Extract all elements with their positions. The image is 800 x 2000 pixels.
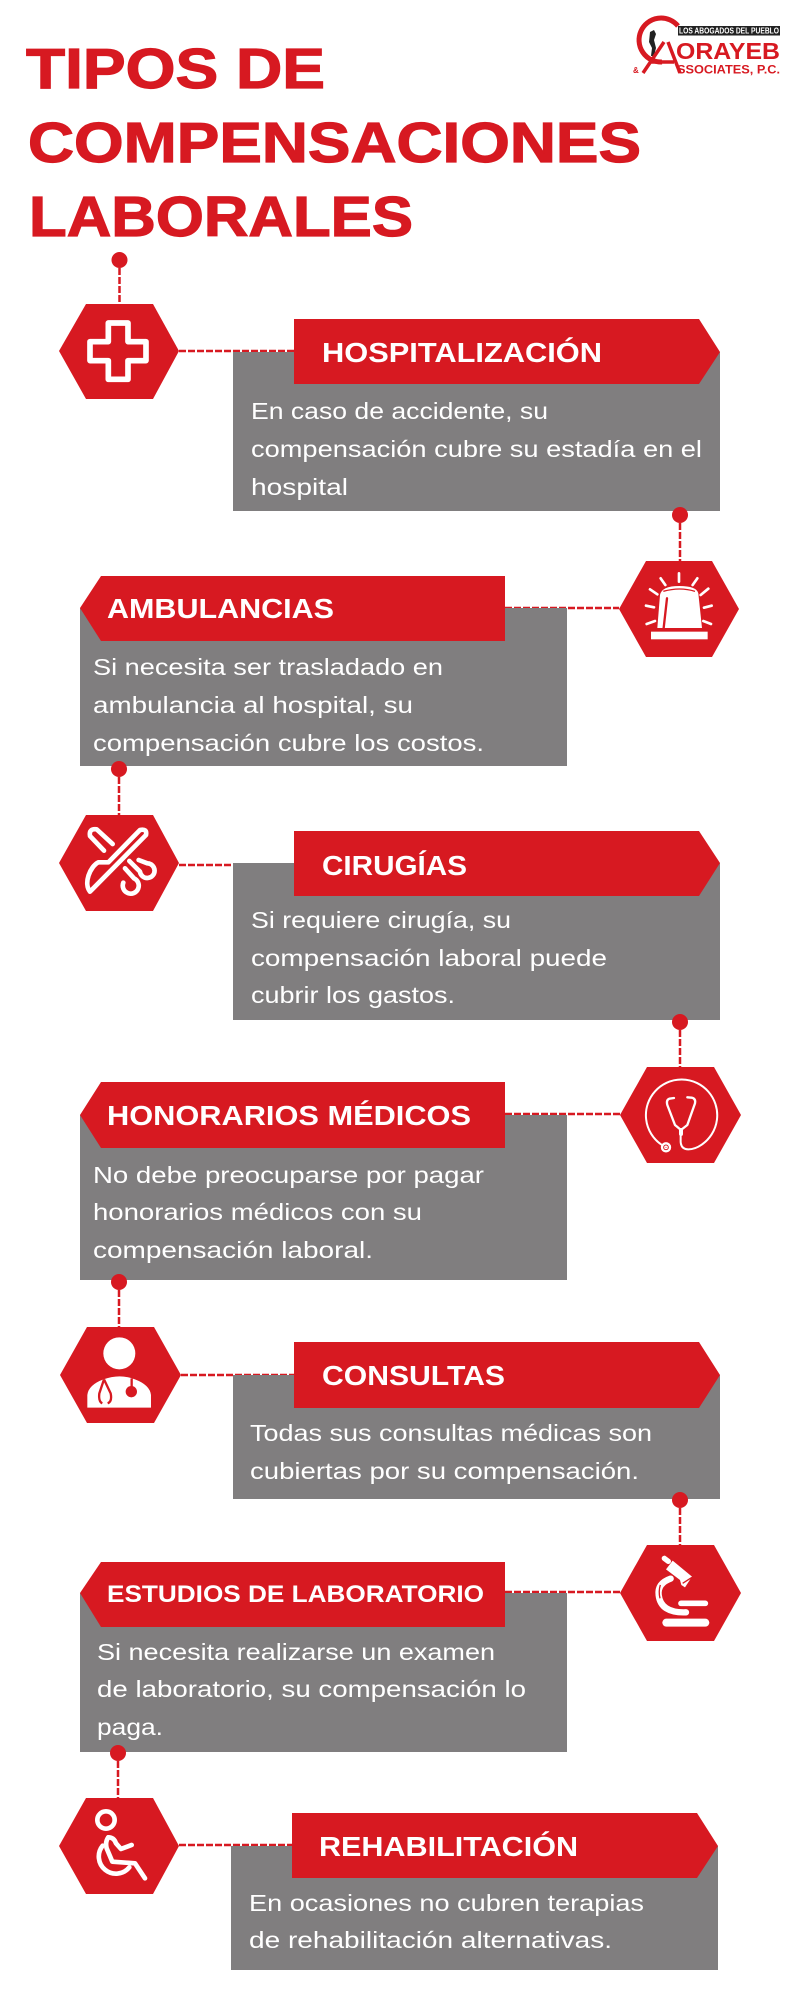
- text block: rehabilitación: [249, 1890, 644, 1953]
- panel: consultas body: [233, 1375, 720, 1499]
- logo: Gorayeb & Associates: &: [633, 66, 639, 75]
- connector: [179, 864, 294, 866]
- heading ribbon: honorarios médicos: HONORARIOS MÉDICOS: [107, 1100, 471, 1131]
- text block: cirugías: cubrir los gastos.: [251, 982, 455, 1008]
- heading ribbon: hospitalización: HOSPITALIZACIÓN: [322, 337, 602, 368]
- connector: [505, 1113, 620, 1115]
- heading ribbon: consultas: CONSULTAS: [322, 1360, 505, 1391]
- heading ribbon: cirugías: [294, 831, 720, 896]
- text block: rehabilitación: de rehabilitación alternativas.: [249, 1927, 612, 1953]
- connector: [505, 1591, 620, 1593]
- text block: ambulancias: [93, 654, 484, 756]
- step 6: estudios de laboratorio: [80, 1545, 741, 1752]
- text block: cirugías: [251, 907, 607, 1008]
- panel: estudios de laboratorio body: [80, 1593, 567, 1752]
- heading ribbon: honorarios médicos: [80, 1082, 505, 1148]
- step 2: ambulancias: [80, 561, 739, 766]
- title: LABORALES: [29, 185, 413, 249]
- title: TIPOS DE: [26, 37, 325, 101]
- icon: microscope: [620, 1545, 741, 1641]
- text block: honorarios médicos: compensación laboral.: [93, 1237, 373, 1263]
- text block: cirugías: compensación laboral puede: [251, 945, 607, 971]
- panel: cirugías body: [233, 863, 720, 1020]
- heading ribbon: rehabilitación: [292, 1813, 718, 1878]
- text block: estudios de laboratorio: paga.: [97, 1714, 163, 1740]
- connector: [179, 350, 294, 352]
- step 4: honorarios médicos: [80, 1067, 741, 1280]
- text block: honorarios médicos: [93, 1162, 484, 1263]
- panel: honorarios médicos body: [80, 1115, 567, 1280]
- connector: [181, 1374, 294, 1376]
- logo: Gorayeb & Associates: LOS ABOGADOS DEL PUEBLO: [679, 27, 779, 36]
- dot and connector 7: [110, 1745, 126, 1798]
- dot and connector 5: [111, 1274, 127, 1327]
- dot and connector 3: [111, 761, 127, 815]
- title: COMPENSACIONES: [28, 111, 641, 175]
- connector: [505, 607, 619, 609]
- logo: Gorayeb & Associates: SSOCIATES, P.C.: [677, 62, 780, 76]
- text block: honorarios médicos: No debe preocuparse por pagar: [93, 1162, 484, 1188]
- connector: [179, 1844, 292, 1846]
- heading ribbon: ambulancias: AMBULANCIAS: [107, 593, 334, 624]
- text block: hospitalización: En caso de accidente, su: [251, 398, 548, 424]
- heading ribbon: consultas: [294, 1342, 720, 1408]
- icon: doctor: [60, 1327, 181, 1423]
- panel: hospitalización body: [233, 352, 720, 511]
- panel: ambulancias body: [80, 608, 567, 766]
- icon: stethoscope: [620, 1067, 741, 1163]
- dot and connector 4: [672, 1014, 688, 1067]
- text block: consultas: [250, 1420, 652, 1484]
- text block: consultas: cubiertas por su compensación.: [250, 1458, 639, 1484]
- text block: consultas: Todas sus consultas médicas son: [250, 1420, 652, 1446]
- heading ribbon: estudios de laboratorio: ESTUDIOS DE LABORATORIO: [107, 1581, 484, 1608]
- dot and connector 2: [672, 507, 688, 561]
- text block: estudios de laboratorio: de laboratorio, su compensación lo: [97, 1676, 526, 1702]
- logo: Gorayeb & Associates: ORAYEB: [676, 38, 780, 64]
- step 7: rehabilitación: [59, 1798, 718, 1970]
- logo: Gorayeb & Associates: [633, 18, 780, 76]
- text block: hospitalización: hospital: [251, 474, 348, 500]
- text block: honorarios médicos: honorarios médicos con su: [93, 1199, 422, 1225]
- heading ribbon: ambulancias: [80, 576, 505, 641]
- text block: hospitalización: compensación cubre su estadía en el: [251, 436, 702, 462]
- heading ribbon: rehabilitación: REHABILITACIÓN: [319, 1831, 578, 1862]
- icon: siren beacon: [619, 561, 739, 657]
- title: [26, 37, 641, 249]
- text block: ambulancias: Si necesita ser trasladado en: [93, 654, 443, 680]
- panel: rehabilitación body: [231, 1846, 718, 1970]
- start dot and connector: [112, 252, 128, 304]
- text block: ambulancias: compensación cubre los costos.: [93, 730, 484, 756]
- text block: rehabilitación: En ocasiones no cubren terapias: [249, 1890, 644, 1916]
- text block: hospitalización: [251, 398, 702, 500]
- dot and connector 6: [672, 1492, 688, 1545]
- step 3: cirugías: [59, 815, 720, 1020]
- step 1: hospitalización: [59, 304, 720, 511]
- icon: wheelchair: [59, 1798, 179, 1894]
- heading ribbon: estudios de laboratorio: [80, 1562, 505, 1627]
- heading ribbon: cirugías: CIRUGÍAS: [322, 850, 467, 881]
- heading ribbon: hospitalización: [294, 319, 720, 384]
- text block: estudios de laboratorio: [97, 1639, 526, 1740]
- text block: estudios de laboratorio: Si necesita realizarse un examen: [97, 1639, 495, 1665]
- text block: ambulancias: ambulancia al hospital, su: [93, 692, 413, 718]
- text block: cirugías: Si requiere cirugía, su: [251, 907, 511, 933]
- step 5: consultas: [60, 1327, 720, 1499]
- icon: scalpel and scissors: [59, 815, 179, 911]
- icon: medical cross: [59, 304, 179, 399]
